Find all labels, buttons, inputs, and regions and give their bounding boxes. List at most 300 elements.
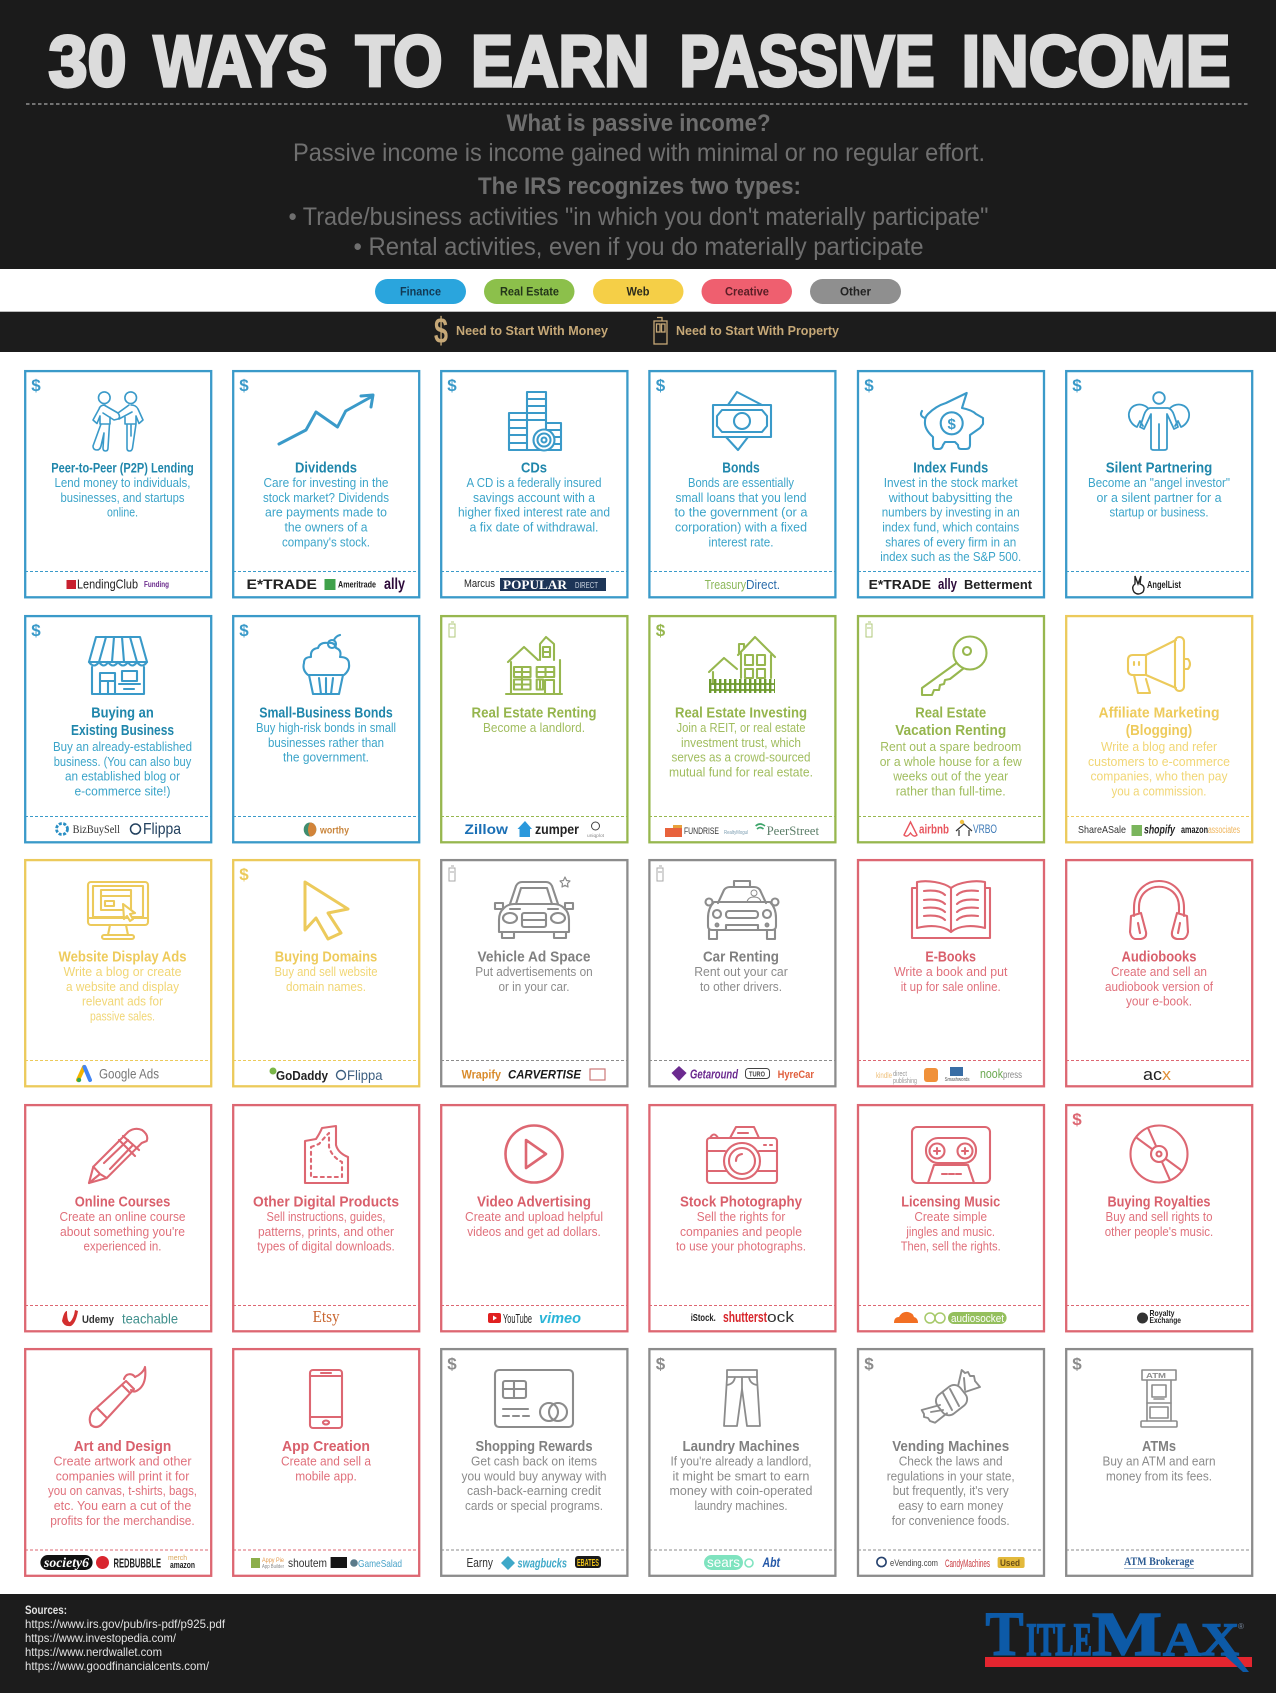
- panel: real estate renting: [441, 616, 627, 842]
- logos: shopify: [1144, 822, 1176, 836]
- description: [880, 739, 1022, 798]
- description: Create and sell a: [281, 1454, 372, 1468]
- icon: wrapped candy: [922, 1370, 980, 1423]
- description: you would buy anyway with: [462, 1468, 606, 1484]
- logos: [464, 577, 606, 592]
- logos: [691, 1309, 795, 1326]
- description: it up for sale online.: [901, 979, 1001, 994]
- description: company's stock.: [282, 534, 370, 549]
- icon: disc: [1130, 1126, 1188, 1182]
- description: [676, 1209, 806, 1254]
- title: PASSIVE: [680, 21, 934, 102]
- description: [54, 475, 190, 520]
- title: Vacation Renting: [895, 722, 1006, 739]
- panel: online courses: [25, 1105, 211, 1331]
- title: Vehicle Ad Space: [478, 948, 590, 966]
- panel: vehicle ad space: [441, 860, 627, 1086]
- icon: credit card: [495, 1370, 573, 1427]
- panel: other digital products: [233, 1105, 419, 1331]
- icon: rising arrow: [279, 395, 373, 444]
- title: Index Funds: [913, 460, 988, 476]
- description: [458, 475, 610, 534]
- logos: x: [1162, 1065, 1172, 1084]
- title: [71, 704, 174, 739]
- title: Real Estate Investing: [675, 704, 807, 722]
- title: WAYS: [154, 21, 328, 102]
- icon: property marker: [657, 866, 663, 881]
- description: Buy and sell rights to: [1106, 1209, 1212, 1224]
- heading: what is passive income: What is passive income?: [506, 110, 770, 137]
- icon: play button: [506, 1126, 562, 1182]
- description: experienced in.: [84, 1239, 162, 1254]
- panel: affiliate marketing: [1066, 616, 1252, 842]
- logos: airbnb: [919, 822, 949, 836]
- logos: audiosocket: [951, 1313, 1004, 1325]
- sources list: https://www.goodfinancialcents.com/: [25, 1659, 210, 1673]
- title: Bonds: [722, 460, 760, 476]
- title: Laundry Machines: [682, 1438, 800, 1455]
- logos: TURO: [749, 1072, 765, 1078]
- logos: App Builder: [262, 1564, 284, 1570]
- panel: licensing music: [858, 1105, 1044, 1331]
- description: without babysitting the: [888, 490, 1013, 505]
- icon: money marker: $: [1072, 1354, 1082, 1374]
- description: businesses, and startups: [60, 490, 185, 505]
- panel: peer-to-peer lending: [25, 371, 211, 597]
- title: Licensing Music: [901, 1194, 1000, 1210]
- logos: [704, 1554, 781, 1570]
- icon: money marker: $: [31, 621, 41, 640]
- legend: categories: Other: [840, 284, 871, 298]
- icon: ATM machine: [1141, 1370, 1177, 1427]
- logos: [488, 1310, 581, 1327]
- description: [256, 720, 396, 765]
- description: but frequently, it's very: [893, 1483, 1009, 1498]
- description: to other drivers.: [700, 979, 782, 994]
- description: audiobook version of: [1105, 979, 1213, 994]
- icon: storefront: [89, 637, 147, 694]
- panel: index funds: [858, 371, 1044, 597]
- description: money with coin-operated: [670, 1483, 812, 1498]
- description: are payments made to: [265, 505, 387, 520]
- description: or a silent partner for a: [1096, 490, 1222, 505]
- title: INCOME: [962, 21, 1230, 102]
- logos: nook: [980, 1067, 1004, 1081]
- title: Video Advertising: [477, 1194, 591, 1210]
- panel: car renting: [649, 860, 835, 1086]
- icon: house: [506, 637, 562, 694]
- logo: TitleMax: AX: [1163, 1614, 1239, 1666]
- icon: houses with fence: [709, 637, 775, 690]
- panel: real estate vacation renting: [858, 616, 1044, 842]
- description: it might be smart to earn: [672, 1468, 810, 1484]
- logos: [77, 1066, 159, 1082]
- description: If you're already a landlord,: [670, 1454, 812, 1468]
- icon: property marker: [449, 866, 455, 881]
- logos: [705, 577, 780, 592]
- logos: ock: [767, 1309, 795, 1326]
- description: Buy and sell website: [274, 964, 378, 979]
- description: [281, 1454, 372, 1484]
- panel: website display ads: [25, 860, 211, 1086]
- icon: paintbrush: [90, 1367, 145, 1427]
- logos: Appy Pie: [262, 1557, 284, 1564]
- description: companies and people: [680, 1224, 802, 1239]
- logos: REDBUBBLE: [114, 1556, 161, 1570]
- description: index fund, which contains: [882, 520, 1020, 534]
- logos: teachable: [122, 1310, 178, 1326]
- title: [48, 21, 1230, 102]
- description: investment trust, which: [681, 735, 801, 750]
- title: Online Courses: [75, 1194, 170, 1210]
- panel: art and design: [25, 1349, 211, 1576]
- logos: [251, 1556, 402, 1570]
- logos: HyreCar: [778, 1069, 815, 1081]
- logos: POPULAR: [503, 577, 568, 592]
- logo: TitleMax: [985, 1601, 1252, 1672]
- icon: monitor: [88, 882, 148, 939]
- description: [1105, 1209, 1213, 1239]
- panel: laundry machines: [649, 1349, 835, 1576]
- title: Real Estate Renting: [472, 704, 596, 722]
- panel: real estate investing: [649, 616, 835, 842]
- logos: [304, 822, 349, 837]
- description: etc. You earn a cut of the: [54, 1498, 191, 1513]
- description: mutual fund for real estate.: [669, 764, 813, 780]
- logos: merch: [168, 1555, 187, 1562]
- description: Sell instructions, guides,: [266, 1209, 386, 1224]
- description: index such as the S&P 500.: [880, 549, 1021, 564]
- panel: buying an existing business: [25, 616, 211, 842]
- title: Other Digital Products: [253, 1194, 399, 1210]
- description: Create simple: [914, 1209, 987, 1224]
- description: [887, 1454, 1015, 1528]
- bullet: rental activities: • Rental activities, even if you do materially participate: [354, 233, 924, 261]
- panel: shopping rewards: [441, 1349, 627, 1576]
- logos: direct: [893, 1071, 907, 1078]
- icon: money marker: $: [1072, 376, 1082, 395]
- icon: headphones: [1130, 881, 1188, 939]
- logos: publishing: [893, 1078, 917, 1085]
- description: [465, 1209, 603, 1239]
- description: [475, 964, 593, 994]
- logos: [62, 1310, 178, 1326]
- logos: [869, 576, 1033, 593]
- description: e-commerce site!): [74, 784, 170, 798]
- description: [1088, 475, 1230, 520]
- description: Create and sell an: [1111, 964, 1207, 979]
- description: shares of every firm in an: [885, 534, 1016, 549]
- title: Silent Partnering: [1106, 460, 1212, 476]
- icon: money marker: $: [239, 621, 249, 640]
- title: Art and Design: [74, 1438, 171, 1455]
- title: EARN: [471, 21, 650, 102]
- icon: piggy bank: [921, 393, 983, 449]
- logos: [1133, 576, 1181, 594]
- legend: categories: Creative: [725, 284, 769, 298]
- description: cards or special programs.: [465, 1498, 603, 1513]
- description: Get cash back on items: [471, 1454, 597, 1468]
- description: [64, 964, 182, 1024]
- icon: money marker: $: [239, 376, 249, 395]
- logos: [1143, 1065, 1172, 1084]
- title: (Blogging): [1126, 722, 1192, 739]
- logos: [904, 820, 997, 836]
- bullet: trade activities: • Trade/business activities "in which you don't materially participate": [288, 203, 988, 231]
- icon: money marker: $: [239, 865, 249, 884]
- description: [674, 475, 808, 549]
- logos: Treasury: [705, 577, 747, 592]
- icon: property marker: [866, 622, 872, 637]
- description: Create an online course: [60, 1209, 186, 1224]
- description: for convenience foods.: [892, 1513, 1010, 1528]
- description: Rent out a spare bedroom: [880, 739, 1021, 754]
- logos: DIRECT: [575, 581, 598, 590]
- logos: Abt: [762, 1554, 781, 1570]
- header panel: [0, 0, 1276, 269]
- logos: Earny: [466, 1555, 493, 1570]
- description: [669, 720, 813, 780]
- description: Care for investing in the: [264, 475, 388, 490]
- logos: ally: [938, 576, 957, 593]
- description: [694, 964, 788, 994]
- description: Write a blog or create: [64, 964, 182, 979]
- description: customers to e-commerce: [1088, 754, 1230, 769]
- title: [895, 704, 1006, 739]
- description: [1102, 1454, 1216, 1484]
- description: or in your car.: [498, 979, 570, 994]
- logos: Getaround: [690, 1066, 739, 1082]
- icon: cupcake: [304, 635, 349, 694]
- logos: ATM Brokerage: [1124, 1554, 1195, 1568]
- description: regulations in your state,: [887, 1468, 1015, 1484]
- title: ATMs: [1142, 1438, 1176, 1455]
- logos: zumper: [535, 821, 579, 837]
- logo: TitleMax: ITLE: [1026, 1614, 1092, 1666]
- logos: [40, 1555, 195, 1571]
- description: to use your photographs.: [676, 1239, 806, 1254]
- logo: TitleMax: T: [986, 1601, 1024, 1669]
- logos: Direct.: [746, 577, 780, 592]
- description: money from its fees.: [1106, 1468, 1212, 1484]
- description: easy to earn money: [898, 1498, 1004, 1513]
- logos: Royalty: [1150, 1308, 1175, 1318]
- title: Car Renting: [703, 948, 779, 966]
- panel: stock photography: [649, 1105, 835, 1331]
- icon: money marker: $: [864, 1354, 874, 1374]
- footer panel: [0, 1594, 1276, 1693]
- logos: E*TRADE: [246, 576, 317, 592]
- panel: silent partnering: [1066, 371, 1252, 597]
- logos: [464, 821, 605, 838]
- logos: [246, 576, 405, 593]
- icon: taxi: [706, 881, 778, 939]
- title: Buying an: [91, 704, 154, 722]
- logos: Marcus: [464, 578, 495, 590]
- panel: bonds: [649, 371, 835, 597]
- logos: ac: [1143, 1065, 1163, 1084]
- icon: smartphone: [310, 1370, 342, 1428]
- description: jingles and music.: [906, 1224, 995, 1239]
- icon: money marker: $: [31, 376, 41, 395]
- panel: small-business bonds: [233, 616, 419, 842]
- title: 30: [48, 21, 126, 102]
- description: Buy an already-established: [53, 739, 192, 754]
- description: an established blog or: [65, 769, 181, 784]
- logos: shoutem: [288, 1556, 327, 1570]
- logos: [466, 1555, 601, 1570]
- description: business. (You can also buy: [54, 754, 192, 769]
- description: A CD is a federally insured: [466, 475, 602, 490]
- title: Shopping Rewards: [476, 1438, 592, 1455]
- description: profits for the merchandise.: [50, 1513, 195, 1528]
- description: other people's music.: [1105, 1224, 1213, 1239]
- icon: pencil: [89, 1129, 147, 1183]
- title: Website Display Ads: [58, 948, 186, 966]
- logos: swagbucks: [518, 1556, 567, 1570]
- description: Become an "angel investor": [1088, 475, 1230, 490]
- icon: megaphone: [1128, 637, 1190, 693]
- description: videos and get ad dollars.: [467, 1224, 601, 1239]
- description: or a whole house for a few: [880, 754, 1022, 769]
- description: relevant ads for: [82, 994, 164, 1009]
- panel: vending machines: [858, 1349, 1044, 1576]
- description: companies, who then pay: [1090, 769, 1228, 784]
- icon: camera: [707, 1127, 777, 1183]
- legend: categories: [375, 279, 901, 304]
- description: Lend money to individuals,: [54, 475, 190, 490]
- icon: money marker: $: [656, 1354, 666, 1374]
- panel: audiobooks: [1066, 860, 1252, 1086]
- logos: Etsy: [313, 1307, 340, 1326]
- description: Sell the rights for: [697, 1209, 786, 1224]
- logos: amazon: [170, 1560, 195, 1570]
- description: you on canvas, t-shirts, bags,: [48, 1483, 197, 1498]
- panel: CDs: [441, 371, 627, 597]
- description: stock market? Dividends: [263, 490, 389, 505]
- logos: uniqplot: [587, 833, 605, 838]
- description: [894, 964, 1008, 994]
- description: Join a REIT, or real estate: [676, 720, 806, 735]
- panel: dividends: [233, 371, 419, 597]
- logos: Betterment: [964, 577, 1033, 592]
- description: savings account with a: [473, 490, 596, 505]
- description: Buy an ATM and earn: [1102, 1454, 1216, 1468]
- description: domain names.: [286, 979, 366, 994]
- legend: start requirements: Need to Start With Money: [456, 324, 608, 338]
- logos: [894, 1312, 1007, 1325]
- legend: start requirements: Need to Start With Property: [676, 324, 839, 338]
- description: interest rate.: [708, 534, 774, 549]
- logos: [1078, 822, 1240, 836]
- logos: press: [1003, 1070, 1022, 1081]
- description: Write a book and put: [894, 964, 1008, 979]
- icon: banknotes: [713, 392, 771, 450]
- title: App Creation: [282, 1438, 370, 1455]
- legend: categories: Web: [626, 284, 650, 298]
- legend: start requirements: [0, 310, 1276, 352]
- logos: [270, 1067, 383, 1083]
- logos: BizBuySell: [73, 822, 121, 836]
- description: your e-book.: [1126, 994, 1192, 1009]
- logos: [462, 1068, 605, 1082]
- icon: money marker: $: [864, 376, 874, 395]
- logos: Funding: [144, 580, 169, 589]
- description: small loans that you lend: [676, 490, 806, 505]
- description: rather than full-time.: [896, 784, 1006, 798]
- description: the owners of a: [284, 520, 368, 534]
- legend: categories: Finance: [400, 284, 441, 298]
- description: you a commission.: [1112, 784, 1206, 798]
- description: [901, 1209, 1001, 1254]
- logos: iStock.: [691, 1313, 716, 1324]
- title: Small-Business Bonds: [259, 704, 393, 722]
- icon: open book: [912, 881, 990, 938]
- title: E-Books: [925, 948, 976, 966]
- logos: GameSalad: [358, 1558, 402, 1570]
- logos: AngelList: [1147, 580, 1181, 591]
- description: Create and upload helpful: [465, 1209, 603, 1224]
- icon: ATM machine: ATM: [1146, 1371, 1166, 1380]
- description: Write a blog and refer: [1101, 739, 1218, 754]
- logos: [876, 1067, 1022, 1085]
- logos: EBATES: [577, 1558, 599, 1569]
- logos: Flippa: [143, 821, 181, 838]
- logo: TitleMax: ®: [1238, 1622, 1244, 1631]
- sources list: https://www.investopedia.com/: [25, 1631, 177, 1645]
- description: Buy high-risk bonds in small: [256, 720, 396, 735]
- description: mobile app.: [295, 1468, 357, 1484]
- description: the government.: [283, 750, 369, 765]
- icon: cursor arrow: [305, 882, 348, 939]
- description: a fix date of withdrawal.: [470, 520, 598, 534]
- sources list: [25, 1603, 226, 1673]
- description: cash-back-earning credit: [467, 1483, 601, 1498]
- description: [48, 1454, 197, 1528]
- title: [1098, 704, 1220, 739]
- heading: IRS types: The IRS recognizes two types:: [478, 173, 801, 200]
- icon: key: [922, 636, 986, 695]
- description: [263, 475, 389, 549]
- icon: cassette: [912, 1127, 990, 1183]
- logos: VRBO: [973, 822, 997, 836]
- title: Stock Photography: [680, 1194, 803, 1210]
- logos: PeerStreet: [767, 823, 819, 838]
- logos: sears: [707, 1554, 740, 1570]
- logo: TitleMax: M: [1092, 1601, 1162, 1669]
- description: Then, sell the rights.: [901, 1239, 1001, 1254]
- description: types of digital downloads.: [257, 1239, 395, 1254]
- description: Check the laws and: [899, 1454, 1003, 1468]
- title: Peer-to-Peer (P2P) Lending: [51, 460, 194, 476]
- title: TO: [356, 21, 442, 102]
- title: CDs: [521, 460, 547, 476]
- logos: [1137, 1308, 1181, 1325]
- description: corporation) with a fixed: [675, 520, 807, 534]
- logos: eVending.com: [890, 1558, 938, 1569]
- title: Real Estate: [915, 704, 986, 722]
- description: businesses rather than: [268, 735, 384, 750]
- description: patterns, prints, and other: [258, 1224, 395, 1239]
- logos: CandyMachines: [945, 1558, 990, 1570]
- description: numbers by investing in an: [882, 505, 1020, 520]
- title: Affiliate Marketing: [1098, 704, 1220, 722]
- title: Vending Machines: [892, 1438, 1009, 1455]
- definition text: Passive income is income gained with minimal or no regular effort.: [293, 139, 985, 167]
- description: weeks out of the year: [892, 769, 1009, 784]
- description: [462, 1454, 606, 1513]
- title: Buying Royalties: [1108, 1194, 1210, 1210]
